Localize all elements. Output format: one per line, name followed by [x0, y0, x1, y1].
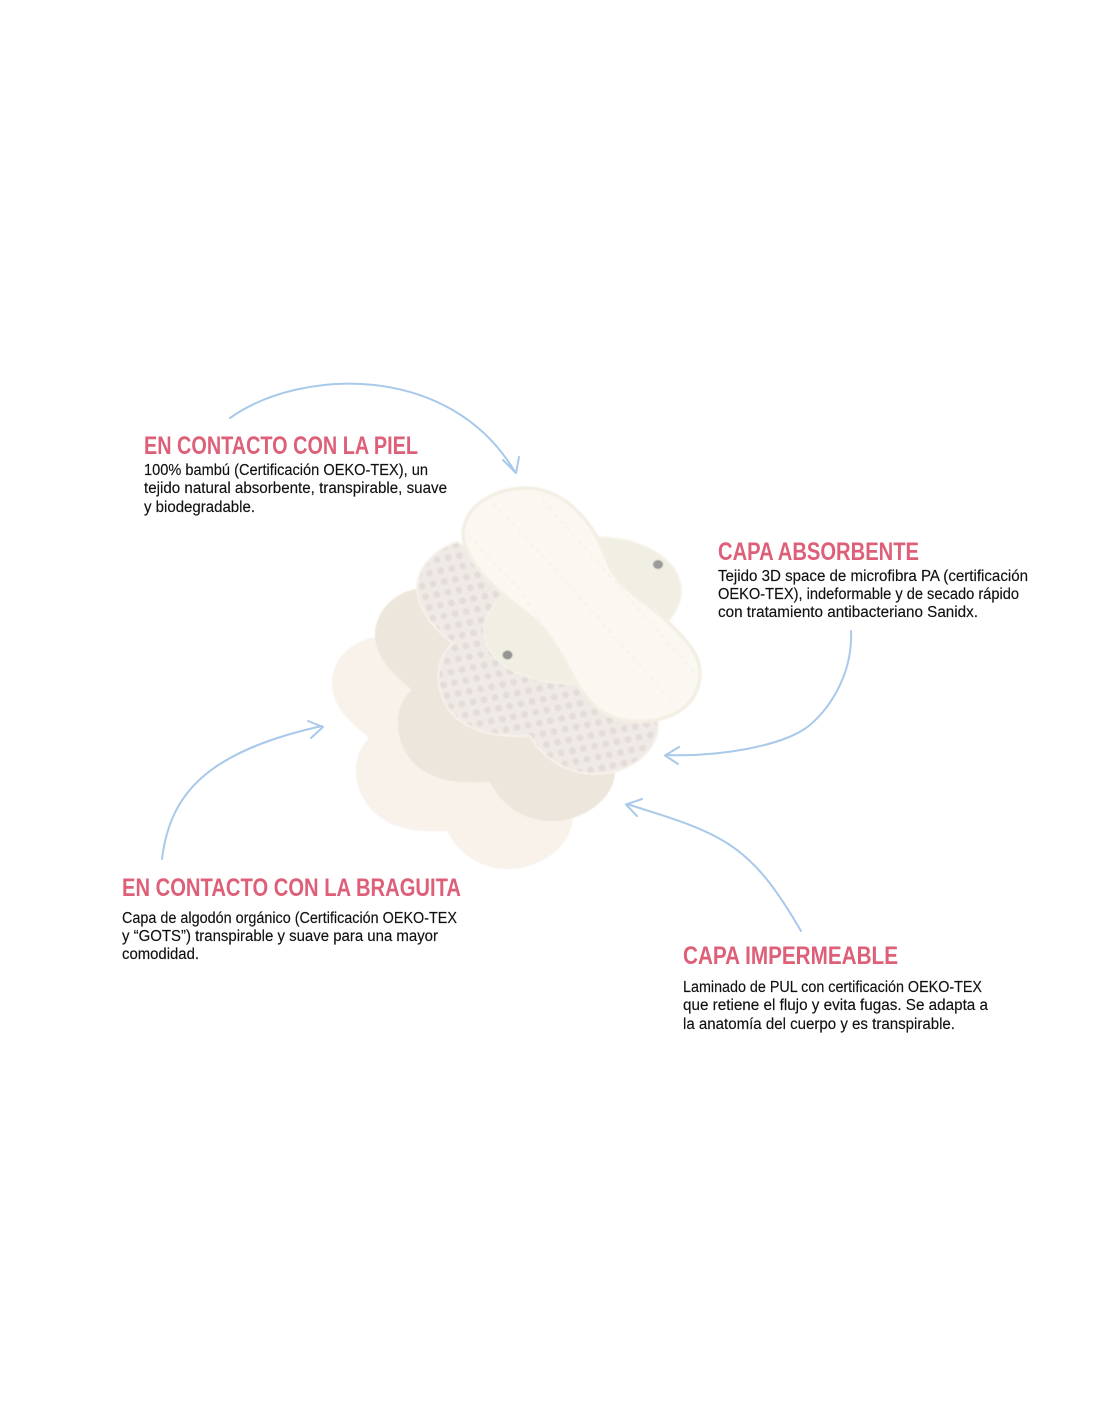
body text [122, 910, 458, 963]
body text: tejido natural absorbente, transpirable, suave [144, 480, 447, 497]
body text: comodidad. [122, 946, 199, 963]
wing: left with snap [484, 596, 578, 684]
body text: Tejido 3D space de microfibra PA (certificación [718, 568, 1028, 585]
heading: CAPA IMPERMEABLE [683, 942, 898, 970]
layer: waterproof PUL [375, 589, 615, 821]
body text [683, 979, 988, 1033]
body text: Laminado de PUL con certificación OEKO-TEX [683, 979, 983, 996]
illustration: layered cloth pad [332, 488, 700, 869]
heading: EN CONTACTO CON LA PIEL [144, 432, 418, 460]
body text: y “GOTS”) transpirable y suave para una mayor [122, 928, 438, 945]
layer: bamboo top pad [463, 488, 700, 721]
body text: que retiene el flujo y evita fugas. Se adapta a [683, 997, 988, 1014]
arrow: underwear contact [162, 721, 323, 859]
text block: en contacto con la piel [144, 432, 447, 516]
body text: con tratamiento antibacteriano Sanidx. [718, 604, 978, 621]
arrow: absorbent layer [665, 631, 851, 764]
text block: capa absorbente [718, 538, 1028, 621]
layer: outer cotton [332, 637, 600, 869]
body text: 100% bambú (Certificación OEKO-TEX), un [144, 462, 428, 479]
heading: CAPA ABSORBENTE [718, 538, 919, 566]
wing: right with snap [590, 538, 681, 624]
arrow: skin contact [230, 384, 519, 473]
heading: EN CONTACTO CON LA BRAGUITA [122, 874, 461, 902]
body text [718, 568, 1028, 621]
body text: y biodegradable. [144, 499, 255, 516]
text block: en contacto con la braguita [122, 874, 461, 963]
body text: OEKO-TEX), indeformable y de secado rápido [718, 586, 1019, 603]
text block: capa impermeable [683, 942, 988, 1033]
body text: Capa de algodón orgánico (Certificación OEKO-TEX [122, 910, 458, 927]
layer: absorbent 3D fabric with dots [417, 542, 658, 774]
arrow: waterproof layer [626, 799, 801, 931]
body text [144, 462, 447, 516]
body text: la anatomía del cuerpo y es transpirable. [683, 1016, 955, 1033]
